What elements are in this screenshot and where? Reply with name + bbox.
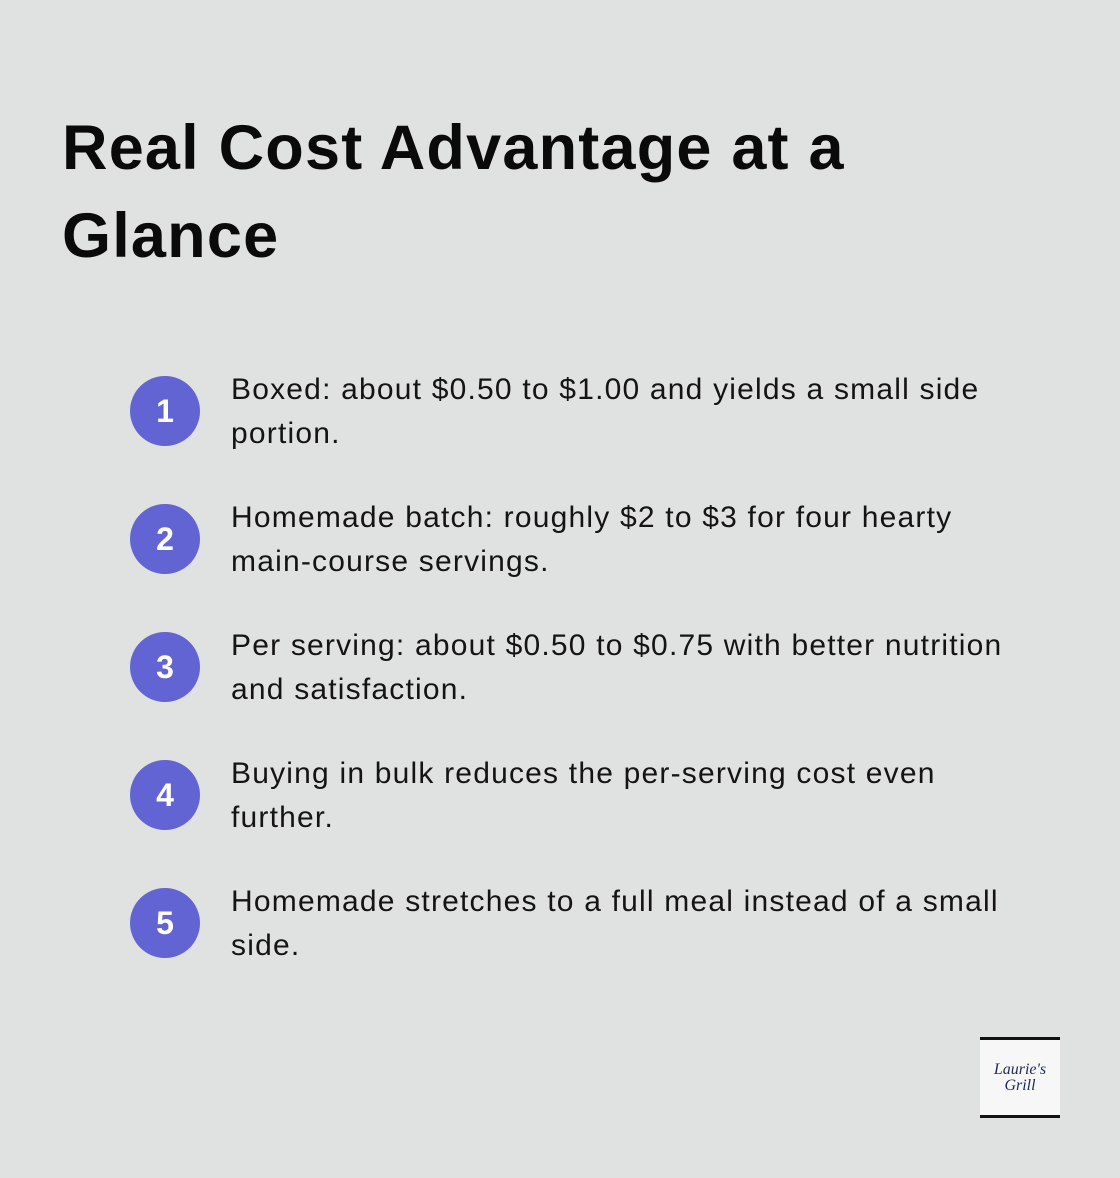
item 3 — [130, 629, 1002, 706]
item 2: 2 — [156, 521, 174, 557]
item 4: Buying in bulk reduces the per-serving cost even — [231, 757, 936, 790]
logo: Grill — [1004, 1077, 1036, 1094]
item 1 — [130, 373, 979, 450]
title — [62, 113, 845, 271]
item 4: 4 — [156, 777, 174, 813]
item 4 — [130, 757, 936, 834]
item 3: Per serving: about $0.50 to $0.75 with better nutrition — [231, 629, 1002, 662]
item 3: and satisfaction. — [231, 673, 468, 706]
title: Glance — [62, 201, 279, 271]
item 2 — [130, 501, 952, 578]
item 5: side. — [231, 929, 300, 962]
item 5: Homemade stretches to a full meal instead of a small — [231, 885, 999, 918]
item 5 — [130, 885, 999, 962]
item 2: main-course servings. — [231, 545, 550, 578]
title: Real Cost Advantage at a — [62, 113, 845, 183]
item 2: Homemade batch: roughly $2 to $3 for four hearty — [231, 501, 952, 534]
item 4: further. — [231, 801, 334, 834]
logo — [980, 1037, 1060, 1118]
item 5: 5 — [156, 905, 174, 941]
item 1: Boxed: about $0.50 to $1.00 and yields a small side — [231, 373, 979, 406]
item 1: portion. — [231, 417, 341, 450]
item 1: 1 — [156, 393, 174, 429]
logo: Laurie's — [994, 1061, 1046, 1078]
item 3: 3 — [156, 649, 174, 685]
